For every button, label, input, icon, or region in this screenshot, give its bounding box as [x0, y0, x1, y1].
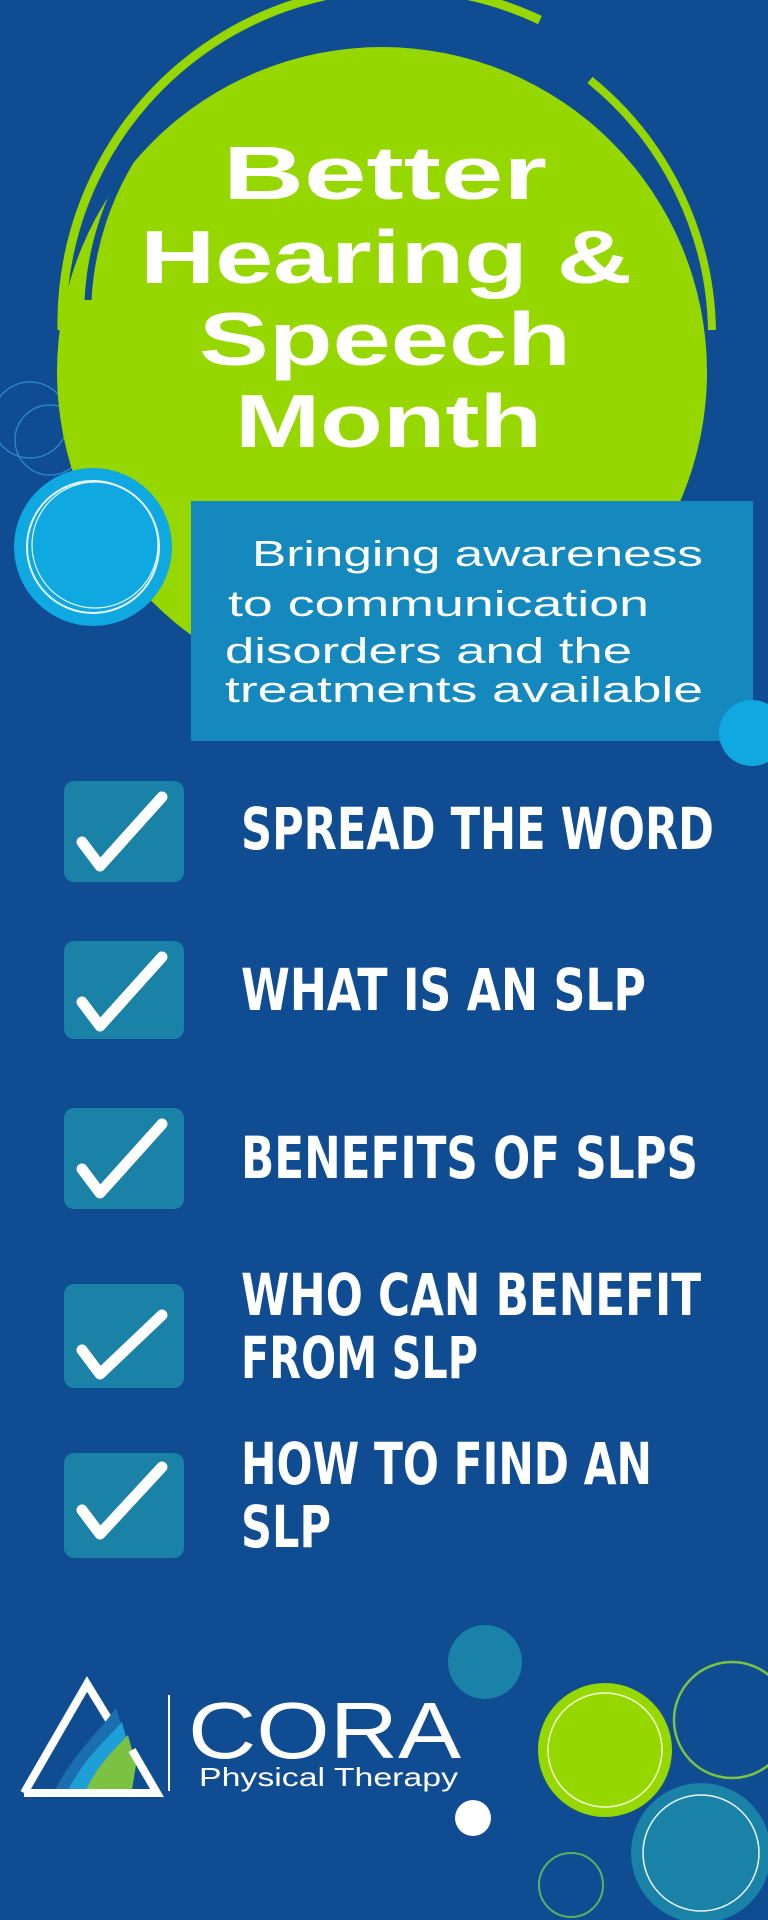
checklist item 2: [64, 941, 646, 1039]
checklist item 5: SLP: [241, 1493, 331, 1561]
checklist item 3: [64, 1108, 698, 1209]
checklist item 1: [64, 781, 714, 882]
checklist item 5: HOW TO FIND AN: [241, 1430, 652, 1498]
subtitle box: disorders and the: [225, 630, 632, 671]
logo divider: [168, 1695, 170, 1791]
checklist item 5: [64, 1430, 652, 1561]
subtitle box: Bringing awareness: [252, 533, 703, 574]
green circle: [57, 0, 712, 697]
title: Month: [235, 379, 542, 463]
title: Speech: [199, 297, 571, 381]
subtitle box: treatments available: [225, 669, 703, 710]
title: Better: [223, 131, 547, 215]
checklist item 4: [64, 1261, 701, 1392]
logo text: Physical Therapy: [199, 1762, 458, 1792]
checklist item 2: WHAT IS AN SLP: [241, 956, 646, 1024]
title: Hearing &: [140, 215, 632, 299]
logo text: CORA: [188, 1686, 462, 1775]
subtitle box: [191, 501, 753, 741]
title: [140, 131, 632, 463]
icon: blue circle left: [14, 468, 172, 626]
logo: triangle: [24, 1684, 157, 1793]
checklist item 4: FROM SLP: [241, 1324, 478, 1392]
subtitle box: to communication: [228, 583, 649, 624]
decorative circles bottom: [448, 1625, 768, 1920]
decorative outline circles top-left: [0, 382, 85, 475]
icon: small blue circle right: [719, 700, 768, 766]
